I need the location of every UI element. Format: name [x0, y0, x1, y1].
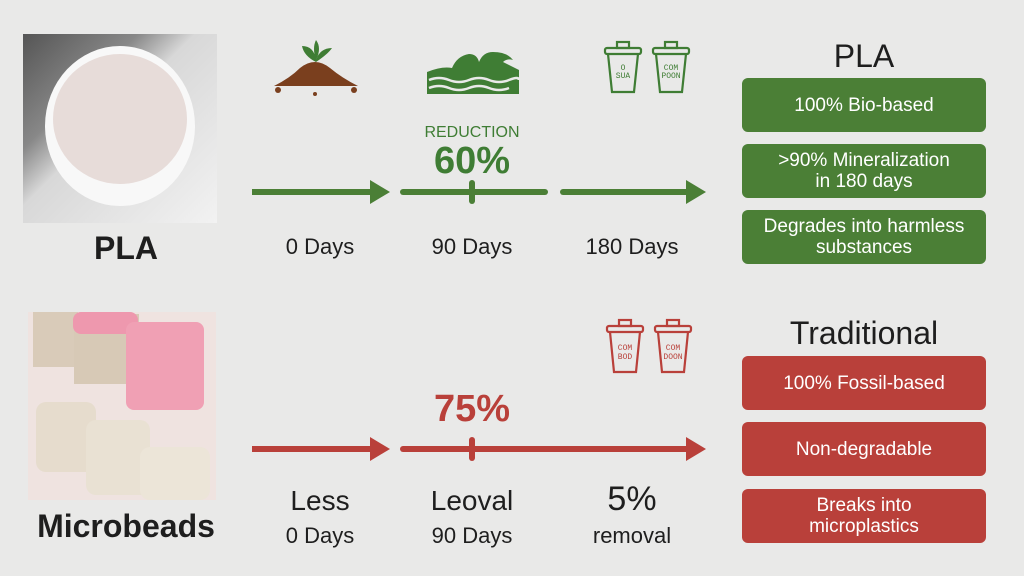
label: PLA: PLA	[94, 230, 158, 266]
text: 60%	[434, 140, 510, 182]
icons: compost bins green	[604, 40, 690, 94]
heading: Traditional: Traditional	[790, 315, 938, 351]
text: >90% Mineralization	[778, 150, 950, 171]
text: Non-degradable	[796, 438, 932, 460]
icons: compost bins green: COM	[664, 64, 678, 73]
arrows: traditional timeline	[252, 437, 706, 461]
label: Microbeads: Microbeads	[37, 508, 215, 544]
icon: soil with sprout	[274, 40, 358, 96]
text: substances	[816, 237, 912, 258]
text: 0 Days	[286, 523, 354, 548]
text: 90 Days	[432, 234, 512, 259]
icons: compost bins red	[606, 318, 692, 374]
labels: traditional: Less	[290, 485, 350, 516]
text: Breaks into	[816, 495, 912, 516]
icons: compost bins green: O	[621, 64, 626, 73]
text: in 180 days	[815, 171, 913, 192]
text: 90 Days	[432, 523, 512, 548]
text: microplastics	[809, 516, 919, 537]
text: removal	[593, 523, 671, 548]
boxes: PLA	[742, 78, 986, 132]
icons: compost bins red: COM	[618, 344, 632, 353]
text: reduction 60%: REDUCTION	[424, 124, 520, 141]
text: 5%	[607, 480, 657, 518]
icons: compost bins red: BOD	[618, 353, 632, 362]
photo: PLA jar	[23, 34, 217, 223]
icons: compost bins red: COM	[666, 344, 680, 353]
heading: PLA: PLA	[834, 38, 894, 74]
icon: waves	[427, 52, 519, 94]
photo: microbeads jars	[28, 312, 216, 500]
text: Leoval	[431, 485, 513, 516]
boxes: PLA: 100% Bio-based	[794, 94, 934, 116]
icons: compost bins green: POON	[661, 72, 681, 81]
boxes: traditional	[742, 356, 986, 410]
text: Degrades into harmless	[764, 216, 964, 237]
labels: PLA days: 0 Days	[286, 234, 354, 259]
boxes: traditional: 100% Fossil-based	[783, 372, 945, 394]
icons: compost bins red: DOON	[663, 353, 683, 362]
icons: compost bins green: SUA	[616, 72, 630, 81]
arrows: PLA timeline	[252, 180, 706, 204]
text: 75%: 75%	[434, 388, 510, 430]
text: 180 Days	[586, 234, 678, 259]
